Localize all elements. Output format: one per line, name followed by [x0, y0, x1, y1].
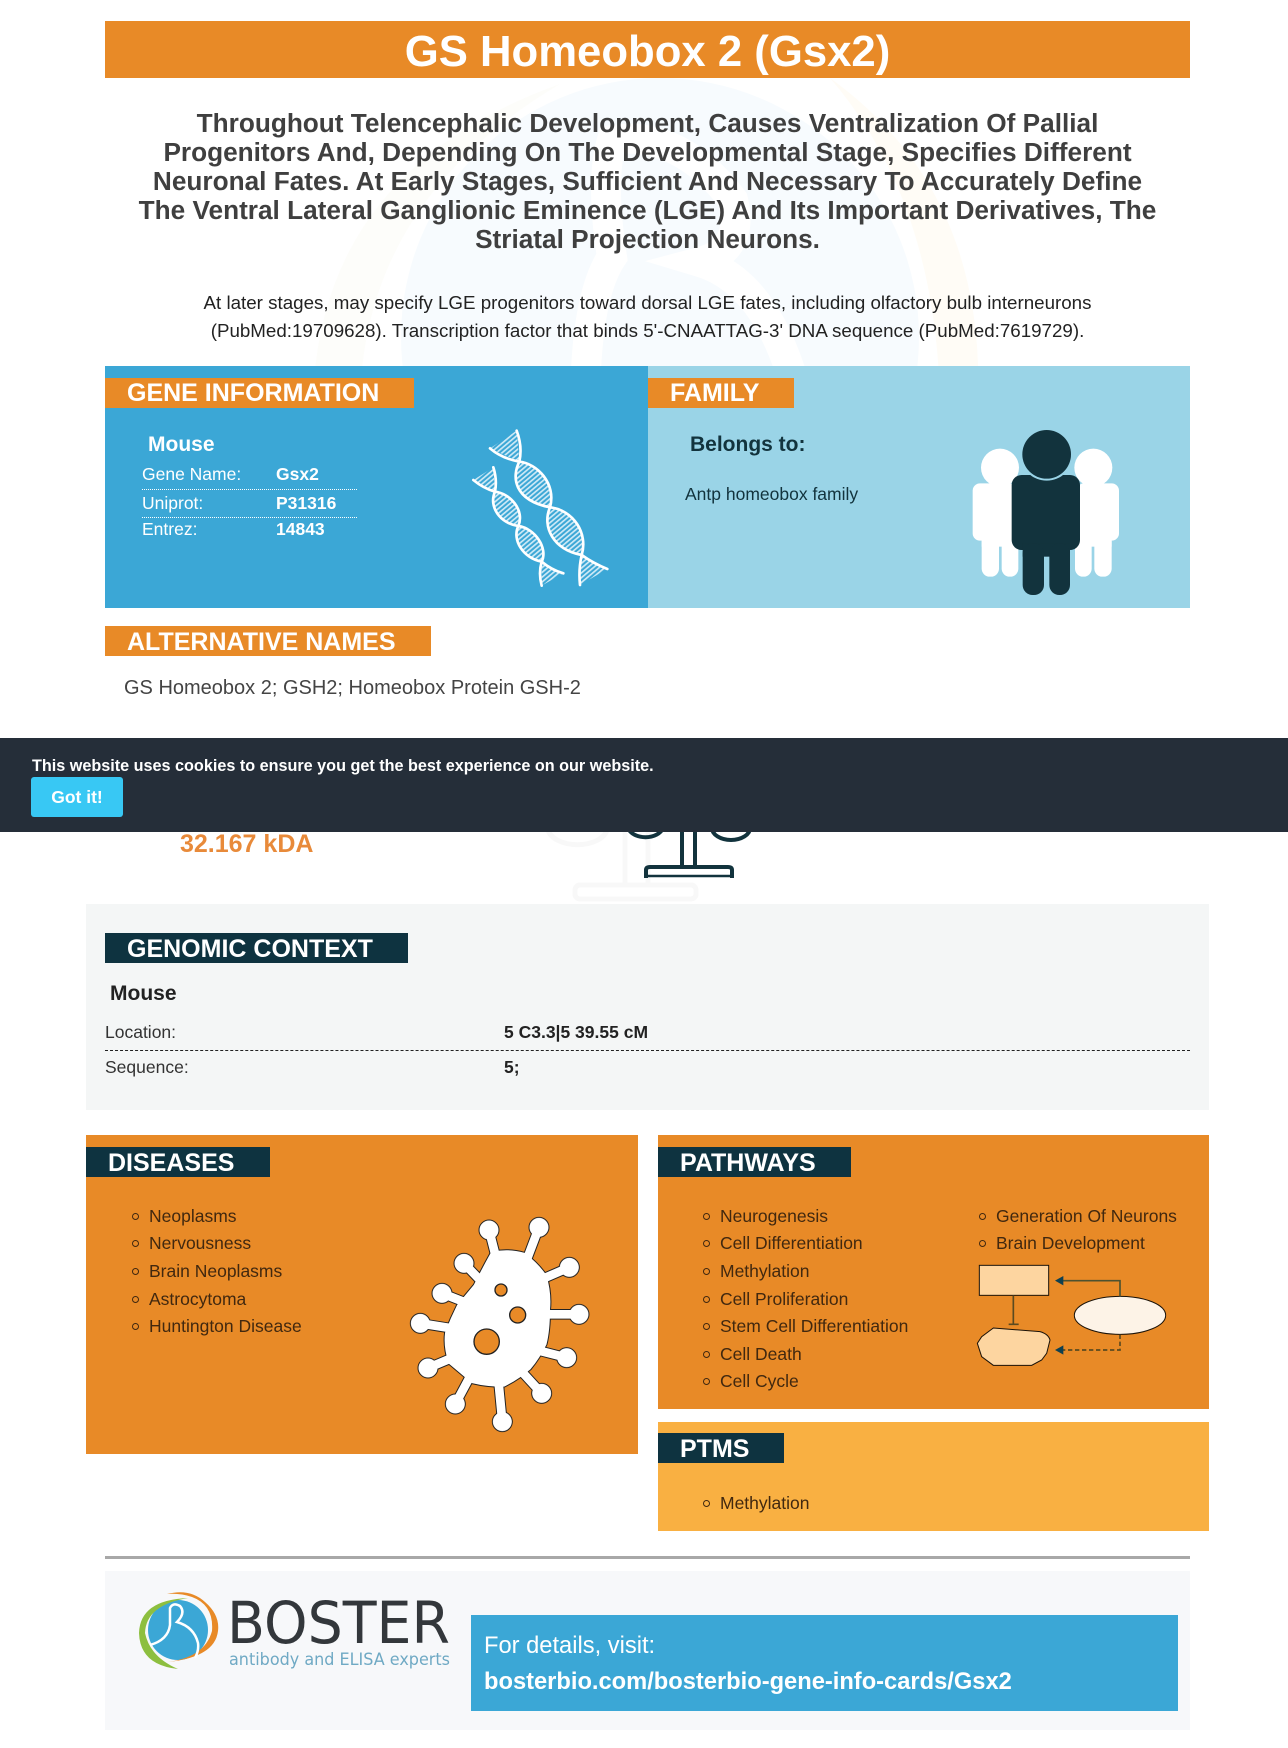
- alternative names text: GS Homeobox 2; GSH2; Homeobox Protein GSH-2: [124, 677, 581, 699]
- location row: Location:: [105, 1022, 176, 1042]
- diseases list: Neoplasms: [149, 1206, 237, 1226]
- title bar: GS Homeobox 2 (Gsx2): [405, 27, 890, 76]
- title bar: [105, 21, 1190, 78]
- subtitle summary: The Ventral Lateral Ganglionic Eminence (LGE) And Its Important Derivatives, The: [139, 195, 1156, 225]
- gene info table: [142, 464, 357, 539]
- description text: [204, 292, 1091, 341]
- gene info table: Gsx2: [276, 464, 319, 484]
- pathways list column one: Cell Differentiation: [720, 1233, 863, 1253]
- ptms list: Methylation: [720, 1493, 810, 1513]
- cookie banner: [0, 738, 1288, 832]
- pathway diagram: [976, 1264, 1166, 1366]
- icon: people: [972, 430, 1119, 595]
- subtitle summary: Throughout Telencephalic Development, Causes Ventralization Of Pallial: [197, 108, 1098, 138]
- heading: family: FAMILY: [670, 379, 759, 407]
- logo: boster: antibody and ELISA experts: [229, 1650, 450, 1670]
- location row: [105, 1022, 648, 1042]
- location row: 5 C3.3|5 39.55 cM: [504, 1022, 648, 1042]
- pathways list column one: Cell Proliferation: [720, 1289, 848, 1309]
- heading: diseases: DISEASES: [108, 1149, 234, 1177]
- pathways list column one: Cell Cycle: [720, 1371, 799, 1391]
- subtitle summary: Progenitors And, Depending On The Developmental Stage, Specifies Different: [163, 137, 1132, 167]
- heading: ptms: PTMS: [680, 1435, 749, 1463]
- heading: alternative names: ALTERNATIVE NAMES: [127, 628, 396, 656]
- sequence row: Sequence:: [105, 1057, 189, 1077]
- heading: genomic context: GENOMIC CONTEXT: [127, 935, 373, 963]
- gene info species: Mouse: [148, 433, 215, 456]
- diseases list: [132, 1206, 302, 1336]
- diseases list: Huntington Disease: [149, 1316, 302, 1336]
- pathways list column one: Methylation: [720, 1261, 810, 1281]
- panel: genomic context: [86, 904, 1209, 1110]
- logo: boster: BOSTER: [227, 1589, 450, 1657]
- sequence row: 5;: [504, 1057, 520, 1077]
- diseases list: Nervousness: [149, 1233, 251, 1253]
- subtitle summary: [138, 108, 1156, 254]
- gene info table: Gene Name:: [142, 464, 241, 484]
- family name: Antp homeobox family: [685, 484, 858, 504]
- footer rule: [105, 1556, 1190, 1559]
- cookie button: [31, 777, 123, 817]
- cookie message: This website uses cookies to ensure you get the best experience on our website.: [32, 757, 654, 775]
- icon: balance scale: [628, 832, 752, 878]
- gene info table: Entrez:: [142, 519, 197, 539]
- callout: details link: [471, 1615, 1178, 1711]
- diseases list: Brain Neoplasms: [149, 1261, 282, 1281]
- panel: ptms: [658, 1422, 1209, 1531]
- cookie button: Got it!: [51, 787, 103, 807]
- callout: details link: For details, visit:: [484, 1633, 655, 1659]
- pathways list column one: Stem Cell Differentiation: [720, 1316, 908, 1336]
- pathways list column one: [703, 1206, 908, 1391]
- panel: diseases: [86, 1135, 638, 1454]
- genomic species: Mouse: [110, 982, 177, 1005]
- subtitle summary: Striatal Projection Neurons.: [475, 224, 820, 254]
- gene info table: 14843: [276, 519, 325, 539]
- heading: ptms: [658, 1433, 784, 1463]
- pathways list column two: Brain Development: [996, 1233, 1145, 1253]
- description text: (PubMed:19709628). Transcription factor that binds 5'-CNAATTAG-3' DNA sequence (PubMed:7619729).: [211, 320, 1084, 341]
- heading: family: [648, 378, 794, 408]
- family label: Belongs to:: [690, 433, 806, 456]
- pathways list column one: Neurogenesis: [720, 1206, 828, 1226]
- panel: family: [648, 366, 1190, 608]
- icon: virus: [410, 1216, 590, 1432]
- gene info table: Uniprot:: [142, 493, 203, 513]
- subtitle summary: Neuronal Fates. At Early Stages, Sufficient And Necessary To Accurately Define: [153, 166, 1142, 196]
- description text: At later stages, may specify LGE progenitors toward dorsal LGE fates, including olfactory bulb interneurons: [204, 292, 1091, 313]
- sequence row: [105, 1057, 520, 1077]
- gene info table: P31316: [276, 493, 336, 513]
- heading: pathways: [658, 1147, 851, 1177]
- panel: footer: [105, 1571, 1190, 1730]
- panel: pathways: [658, 1135, 1209, 1409]
- logo: boster: [139, 1589, 450, 1670]
- heading: pathways: PATHWAYS: [680, 1149, 816, 1177]
- panel: gene information: [105, 366, 648, 608]
- pathways list column two: Generation Of Neurons: [996, 1206, 1177, 1226]
- icon: dna: [472, 429, 609, 587]
- background watermark logo: [832, 80, 978, 366]
- heading: gene information: GENE INFORMATION: [127, 379, 379, 407]
- pathways list column two: [979, 1206, 1177, 1253]
- molecular mass value: 32.167 kDA: [180, 830, 313, 858]
- heading: diseases: [86, 1147, 270, 1177]
- pathways list column one: Cell Death: [720, 1344, 802, 1364]
- diseases list: Astrocytoma: [149, 1289, 246, 1309]
- callout: details link: bosterbio.com/bosterbio-gene-info-cards/Gsx2: [484, 1669, 1012, 1695]
